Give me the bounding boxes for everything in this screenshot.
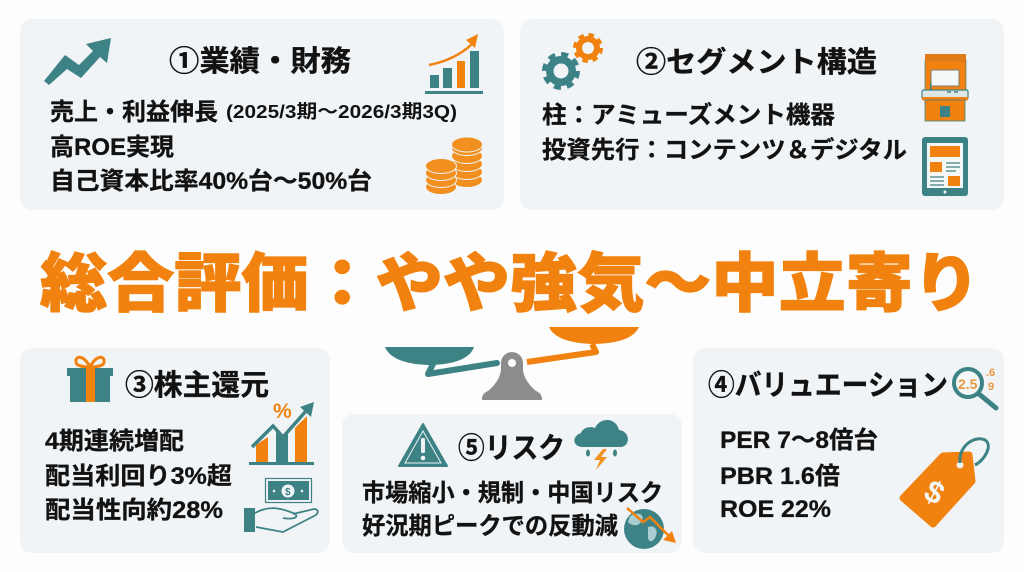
heading: 株主還元: ③株主還元 <box>125 369 269 402</box>
icon: magnifier <box>954 367 996 408</box>
icon: magnifier: .6 <box>986 367 995 379</box>
text: 高ROE実現: 高ROE実現 <box>50 134 174 161</box>
text: 配当利回り: 配当利回り3%超 <box>45 463 232 490</box>
panel: 業績・財務 <box>20 19 504 210</box>
text: PER: PER 7〜8倍台 <box>720 427 878 454</box>
panel: バリュエーション <box>693 348 1004 553</box>
text: 売上・利益伸長: 売上・利益伸長 <box>50 99 218 126</box>
icon: warning triangle <box>399 424 447 466</box>
icon: price tag: $ <box>919 473 950 512</box>
title: 総合評価：やや強気〜中立寄り <box>40 248 980 320</box>
icon: bar chart with arrow <box>425 34 483 94</box>
panel: セグメント構造 <box>520 19 1004 210</box>
panel: リスク <box>342 414 682 553</box>
icon: money on hand: $ <box>285 487 291 498</box>
panel: 株主還元 <box>20 348 330 553</box>
icon: balance scale <box>385 327 639 400</box>
icon: magnifier: 2.5 <box>958 376 978 392</box>
heading: 業績・財務: ①業績・財務 <box>169 45 351 78</box>
text: 売上・利益伸長 <box>50 99 457 126</box>
heading: リスク: ⑤リスク <box>458 432 565 465</box>
icon: tablet <box>922 137 968 196</box>
icon: price tag <box>903 439 988 524</box>
text: 投資先行: 投資先行：コンテンツ＆デジタル <box>542 136 907 164</box>
heading: バリュエーション: ④バリュエーション <box>708 369 948 402</box>
text: 柱: 柱：アミューズメント機器 <box>542 101 835 129</box>
text: PBR: PBR 1.6倍 <box>720 463 840 490</box>
icon: magnifier: 9 <box>988 381 994 393</box>
text: 配当性向: 配当性向約28% <box>45 497 223 524</box>
text: 好況期ピーク: 好況期ピークでの反動減 <box>362 513 618 540</box>
icon: globe with down arrow <box>624 508 676 549</box>
text: 市場縮小: 市場縮小・規制・中国リスク <box>362 480 663 507</box>
icon: gears <box>544 35 601 88</box>
icon: percent chart <box>249 400 314 465</box>
icon: trend arrow <box>44 38 111 85</box>
icon: money on hand <box>244 478 318 532</box>
heading: セグメント構造: ②セグメント構造 <box>636 46 877 79</box>
text: ROE: ROE 22% <box>720 496 831 523</box>
icon: coins <box>426 137 482 194</box>
icon: storm cloud <box>574 420 628 470</box>
text: 売上・利益伸長: (2025/3期〜2026/3期3Q) <box>226 101 457 122</box>
text: 4期連続増配: 4期連続増配 <box>45 428 184 455</box>
icon: gift box <box>67 357 113 402</box>
icon: percent chart: % <box>273 400 292 423</box>
text: 自己資本比率: 自己資本比率40%台〜50%台 <box>50 168 372 195</box>
icon: arcade cabinet <box>922 54 968 121</box>
